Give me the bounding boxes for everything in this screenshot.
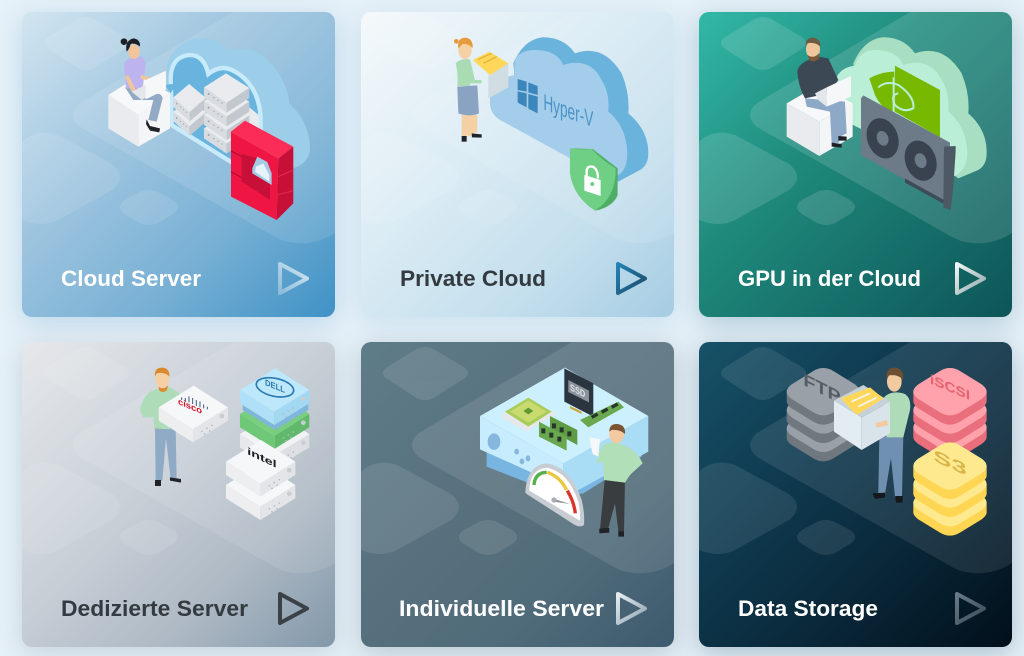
heading: Individuelle Server (399, 596, 604, 621)
icon: green logo (869, 66, 940, 137)
heading: Dedizierte Server (61, 596, 248, 621)
icon: windows logo (518, 79, 538, 113)
icon: server racks (173, 73, 259, 154)
icon: person with file box (454, 38, 508, 142)
logo text: Hyper-V (543, 89, 594, 132)
icon: person with laptop on cube (108, 38, 170, 147)
icon: performance gauge (525, 463, 584, 526)
panel: Private Cloud (361, 12, 674, 317)
icon: play arrow (280, 264, 307, 293)
illustration: GPU cloud with person (787, 37, 987, 210)
icon: person with paper (589, 424, 643, 537)
icon: person carrying box (140, 368, 181, 486)
icon: play arrow (957, 594, 984, 623)
icon: red stack logo (231, 121, 293, 220)
panel: Individuelle Server (361, 342, 674, 647)
label text: SSD (570, 382, 585, 400)
illustration: person with branded server boxes (140, 368, 309, 520)
illustration: cloud with servers, person and red logo (108, 38, 310, 220)
stack label: FTP (803, 369, 841, 407)
icon: memory modules (539, 402, 624, 451)
panel: GPU in der Cloud (699, 12, 1012, 317)
icon: security shield (570, 148, 618, 211)
icon: play arrow (957, 264, 984, 293)
icon: graphics card (861, 95, 956, 210)
icon: cloud (835, 37, 987, 178)
icon: FTP stack (787, 368, 860, 461)
icon: play arrow (280, 594, 307, 623)
illustration: configurable server platform (480, 368, 648, 537)
icon: person with laptop on cube (787, 38, 853, 156)
heading: GPU in der Cloud (738, 266, 921, 291)
icon: iSCSI stack (913, 368, 987, 460)
icon: cpu chip (500, 398, 557, 432)
panel: Dedizierte Server (22, 342, 335, 647)
icon: dell and green server stack (240, 368, 309, 469)
icon: ssd (564, 368, 593, 417)
icon: intel server stack (226, 440, 295, 520)
icon: play arrow (618, 264, 645, 293)
stack label: S3 (933, 445, 967, 480)
icon: person with file box (834, 368, 910, 503)
illustration: storage stacks with person (787, 368, 987, 536)
heading: Private Cloud (400, 266, 546, 291)
logo text: intel (247, 445, 277, 471)
logo text: DELL (265, 377, 285, 395)
heading: Cloud Server (61, 266, 201, 291)
icon: play arrow (618, 594, 645, 623)
icon: cloud (490, 37, 648, 182)
panel: Data Storage (699, 342, 1012, 647)
panel: Cloud Server (22, 12, 335, 317)
icon: cisco box (159, 386, 228, 442)
stack label: iSCSI (930, 371, 970, 403)
icon: S3 stack (913, 442, 987, 536)
logo text: cisco (178, 396, 202, 416)
illustration: Hyper-V cloud with person and shield (454, 37, 648, 211)
icon: cloud (165, 38, 310, 168)
icon: server platform (480, 368, 648, 498)
heading: Data Storage (738, 596, 878, 621)
